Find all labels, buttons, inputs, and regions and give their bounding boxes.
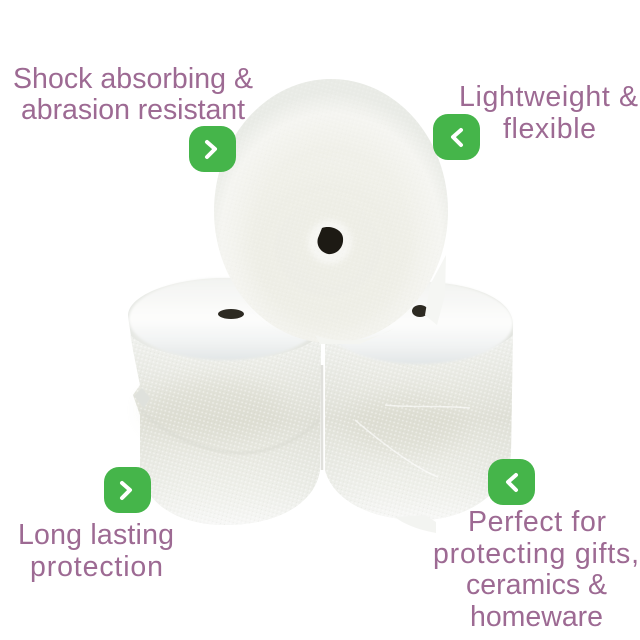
label text: protecting gifts, (433, 538, 639, 570)
label text: ceramics & (466, 569, 607, 601)
label text: Lightweight & (459, 81, 638, 113)
label text: Shock absorbing & (13, 63, 253, 95)
top roll (214, 79, 448, 344)
left roll (128, 278, 321, 525)
icon: left chevron (488, 459, 535, 505)
label text: homeware (470, 601, 603, 633)
label text: protection (30, 551, 163, 583)
product photo: three bubble wrap rolls (128, 79, 513, 533)
right roll (325, 282, 513, 533)
icon: right chevron (189, 126, 236, 172)
label text: flexible (503, 113, 596, 145)
icon: left chevron (433, 114, 480, 160)
label text: Perfect for (468, 506, 606, 538)
label text: Long lasting (18, 519, 174, 551)
label text: abrasion resistant (21, 94, 245, 126)
callout: long lasting (18, 467, 174, 583)
callout: lightweight (433, 81, 638, 160)
callout: perfect for protecting (433, 459, 639, 633)
callout: shock absorbing (13, 63, 253, 172)
seam between lower rolls (321, 365, 323, 470)
icon: right chevron (104, 467, 151, 513)
